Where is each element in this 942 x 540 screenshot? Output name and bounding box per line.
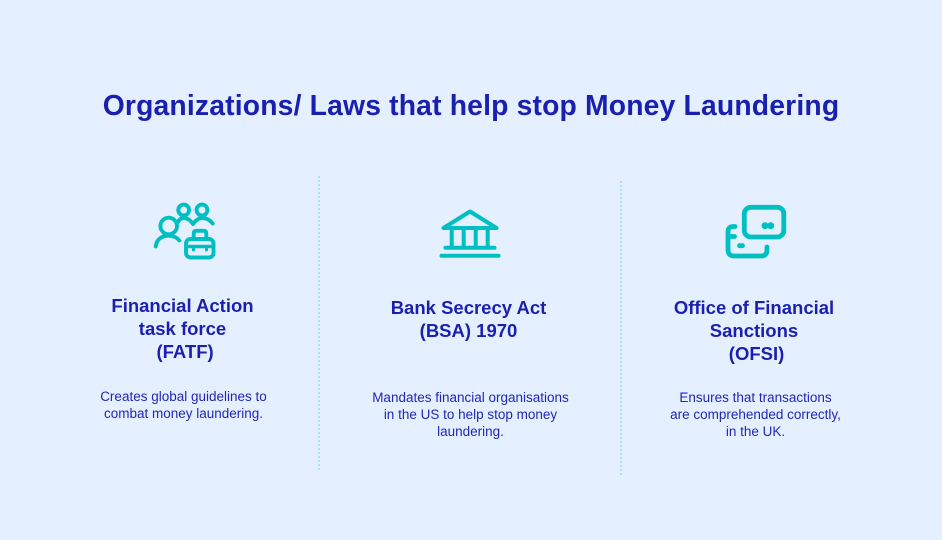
heading: BSA: (BSA) 1970: [420, 320, 517, 341]
heading: FATF: (FATF): [156, 341, 214, 362]
divider right: [620, 181, 622, 476]
heading: OFSI: Sanctions: [710, 320, 798, 341]
description: FATF: Creates global guidelines to: [100, 389, 267, 404]
divider left: [318, 176, 320, 471]
description: BSA: in the US to help stop money: [384, 407, 557, 422]
description: BSA: laundering.: [437, 424, 504, 439]
heading: OFSI: Office of Financial: [674, 297, 834, 318]
description: OFSI: in the UK.: [726, 424, 785, 439]
description: OFSI: Ensures that transactions: [679, 390, 832, 405]
description: OFSI: are comprehended correctly,: [670, 407, 841, 422]
description: FATF: combat money laundering.: [104, 406, 263, 421]
heading: FATF: Financial Action: [111, 295, 254, 316]
description: BSA: [372, 390, 569, 439]
description: FATF: [100, 389, 267, 421]
heading: BSA: [391, 297, 546, 341]
heading: BSA: Bank Secrecy Act: [391, 297, 546, 318]
description: OFSI: [670, 390, 841, 439]
heading: OFSI: [674, 297, 834, 364]
heading: FATF: task force: [139, 318, 226, 339]
description: BSA: Mandates financial organisations: [372, 390, 569, 405]
heading: OFSI: (OFSI): [729, 343, 784, 364]
title: Organizations/ Laws that help stop Money Laundering: [103, 89, 839, 121]
heading: FATF: [111, 295, 254, 362]
